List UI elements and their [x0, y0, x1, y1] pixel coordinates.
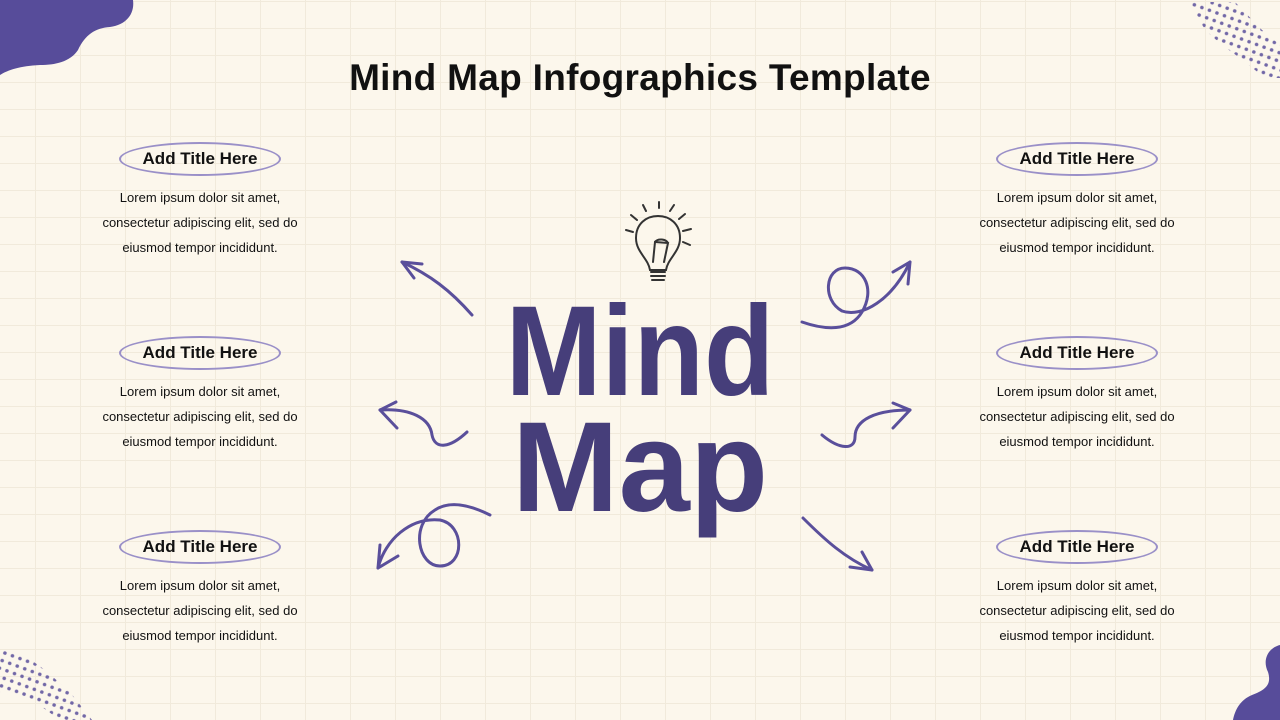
panel: right middle: eiusmod tempor incididunt.: [999, 434, 1155, 449]
panel: right top: consectetur adipiscing elit, sed do: [979, 215, 1175, 230]
panel: right middle: Add Title Here: [1020, 343, 1134, 362]
panel: left top: Add Title Here: [143, 149, 257, 168]
panel: left top: Lorem ipsum dolor sit amet,: [120, 190, 280, 205]
panel: right top: eiusmod tempor incididunt.: [999, 240, 1155, 255]
arrow: middle-left: [380, 402, 467, 445]
panel: left middle: Add Title Here: [143, 343, 257, 362]
panel: right top: [979, 142, 1175, 255]
panel: right middle: consectetur adipiscing elit, sed do: [979, 409, 1175, 424]
title: Mind Map Infographics Template: [349, 57, 931, 98]
central text: Mind Map: Map: [512, 396, 768, 539]
panel: right bottom: [979, 530, 1175, 643]
blob: bottom-right: [1233, 645, 1280, 720]
panel: left bottom: Add Title Here: [143, 537, 257, 556]
panel: left top: [102, 142, 298, 255]
arrow: bottom-right: [803, 518, 872, 570]
panel: left bottom: [102, 530, 298, 643]
panel: right bottom: consectetur adipiscing elit, sed do: [979, 603, 1175, 618]
panel: left middle: consectetur adipiscing elit, sed do: [102, 409, 298, 424]
panel: left middle: [102, 336, 298, 449]
panel: left middle: Lorem ipsum dolor sit amet,: [120, 384, 280, 399]
panel: right top: Add Title Here: [1020, 149, 1134, 168]
panel: right bottom: Add Title Here: [1020, 537, 1134, 556]
panel: right bottom: Lorem ipsum dolor sit amet,: [997, 578, 1157, 593]
panel: left bottom: eiusmod tempor incididunt.: [122, 628, 278, 643]
dots: top-right: [1190, 2, 1280, 78]
panel: right middle: Lorem ipsum dolor sit amet,: [997, 384, 1157, 399]
panel: left top: eiusmod tempor incididunt.: [122, 240, 278, 255]
central text: Mind Map: [506, 280, 774, 539]
arrows: [378, 262, 910, 570]
blob: top-left: [0, 0, 133, 75]
panel: right top: Lorem ipsum dolor sit amet,: [997, 190, 1157, 205]
arrow: bottom-left: [378, 505, 490, 568]
icon: light bulb: [626, 202, 691, 280]
arrow: top-right: [802, 262, 910, 328]
arrow: top-left: [402, 262, 472, 315]
panel: left bottom: Lorem ipsum dolor sit amet,: [120, 578, 280, 593]
panel: left middle: eiusmod tempor incididunt.: [122, 434, 278, 449]
panel: right middle: [979, 336, 1175, 449]
arrow: middle-right: [822, 403, 910, 447]
panel: left bottom: consectetur adipiscing elit, sed do: [102, 603, 298, 618]
central text: Mind Map: Mind: [506, 280, 774, 423]
panel: left top: consectetur adipiscing elit, sed do: [102, 215, 298, 230]
panel: right bottom: eiusmod tempor incididunt.: [999, 628, 1155, 643]
dots: bottom-left: [0, 648, 92, 720]
